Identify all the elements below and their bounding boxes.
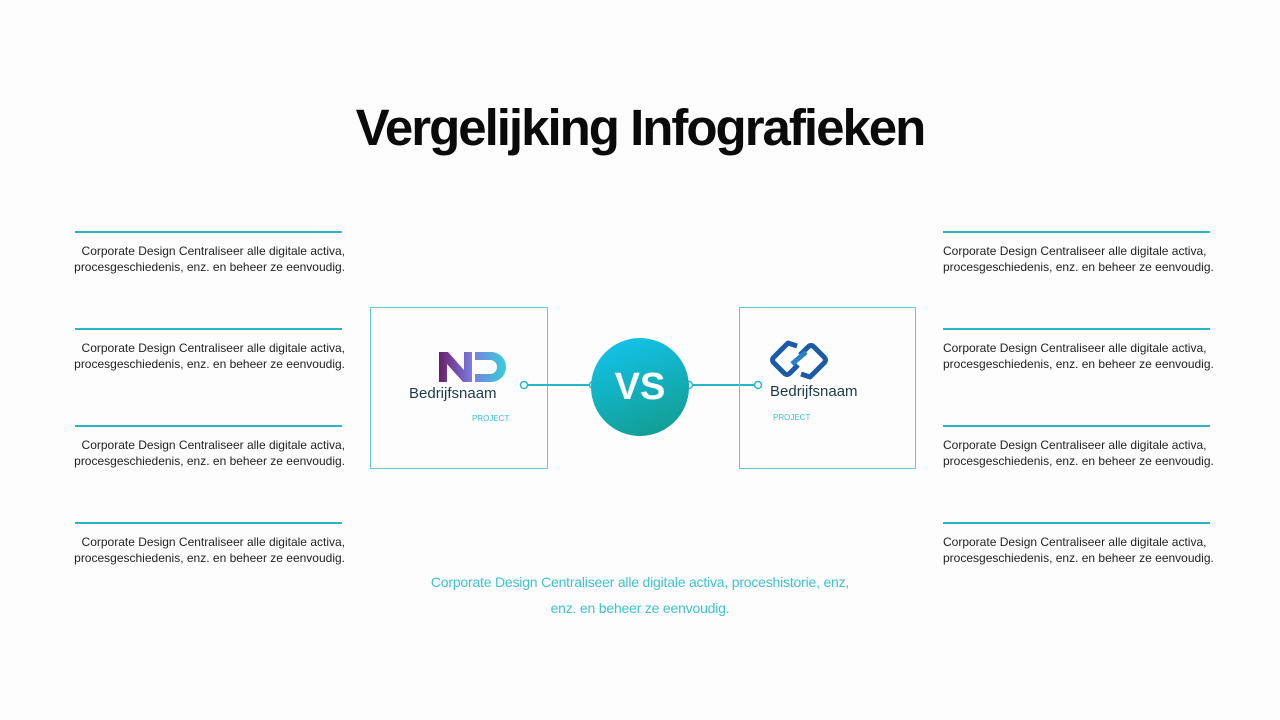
right item 3: procesgeschiedenis, enz. en beheer ze eenvoudig.	[943, 454, 1214, 468]
left item 2	[74, 328, 345, 371]
left item 2: procesgeschiedenis, enz. en beheer ze eenvoudig.	[74, 357, 345, 371]
left item 3	[74, 425, 345, 468]
VS circle: VS	[615, 366, 665, 408]
right item 4: procesgeschiedenis, enz. en beheer ze eenvoudig.	[943, 551, 1214, 565]
left item 4: Corporate Design Centraliseer alle digitale activa,	[82, 535, 345, 549]
bottom caption	[431, 574, 849, 616]
right item 1: procesgeschiedenis, enz. en beheer ze eenvoudig.	[943, 260, 1214, 274]
right item 3	[943, 425, 1214, 468]
right item 4: Corporate Design Centraliseer alle digitale activa,	[943, 535, 1206, 549]
project label: PROJECT	[773, 413, 810, 422]
panel: left brand	[370, 307, 548, 469]
left item 4	[74, 522, 345, 565]
brand name: Bedrijfsnaam	[409, 385, 497, 402]
icon: ND logo	[439, 352, 506, 382]
bottom caption: Corporate Design Centraliseer alle digitale activa, proceshistorie, enz,	[431, 574, 849, 590]
bottom caption: enz. en beheer ze eenvoudig.	[551, 600, 729, 616]
connector left	[520, 380, 592, 390]
left item 1: Corporate Design Centraliseer alle digitale activa,	[82, 244, 345, 258]
right item 2	[943, 328, 1214, 371]
left item 1	[74, 231, 345, 274]
icon: chain logo	[770, 340, 828, 380]
project label: PROJECT	[472, 414, 509, 423]
brand name: Bedrijfsnaam	[770, 383, 858, 400]
connector right	[688, 380, 762, 390]
left item 3: procesgeschiedenis, enz. en beheer ze eenvoudig.	[74, 454, 345, 468]
left item 2: Corporate Design Centraliseer alle digitale activa,	[82, 341, 345, 355]
right item 2: procesgeschiedenis, enz. en beheer ze eenvoudig.	[943, 357, 1214, 371]
right item 4	[943, 522, 1214, 565]
left item 4: procesgeschiedenis, enz. en beheer ze eenvoudig.	[74, 551, 345, 565]
left item 3: Corporate Design Centraliseer alle digitale activa,	[82, 438, 345, 452]
right item 1	[943, 231, 1214, 274]
VS circle	[591, 338, 689, 436]
left item 1: procesgeschiedenis, enz. en beheer ze eenvoudig.	[74, 260, 345, 274]
right item 1: Corporate Design Centraliseer alle digitale activa,	[943, 244, 1206, 258]
right item 3: Corporate Design Centraliseer alle digitale activa,	[943, 438, 1206, 452]
title: Vergelijking Infografieken	[356, 99, 924, 156]
panel: right brand	[739, 307, 916, 469]
right item 2: Corporate Design Centraliseer alle digitale activa,	[943, 341, 1206, 355]
